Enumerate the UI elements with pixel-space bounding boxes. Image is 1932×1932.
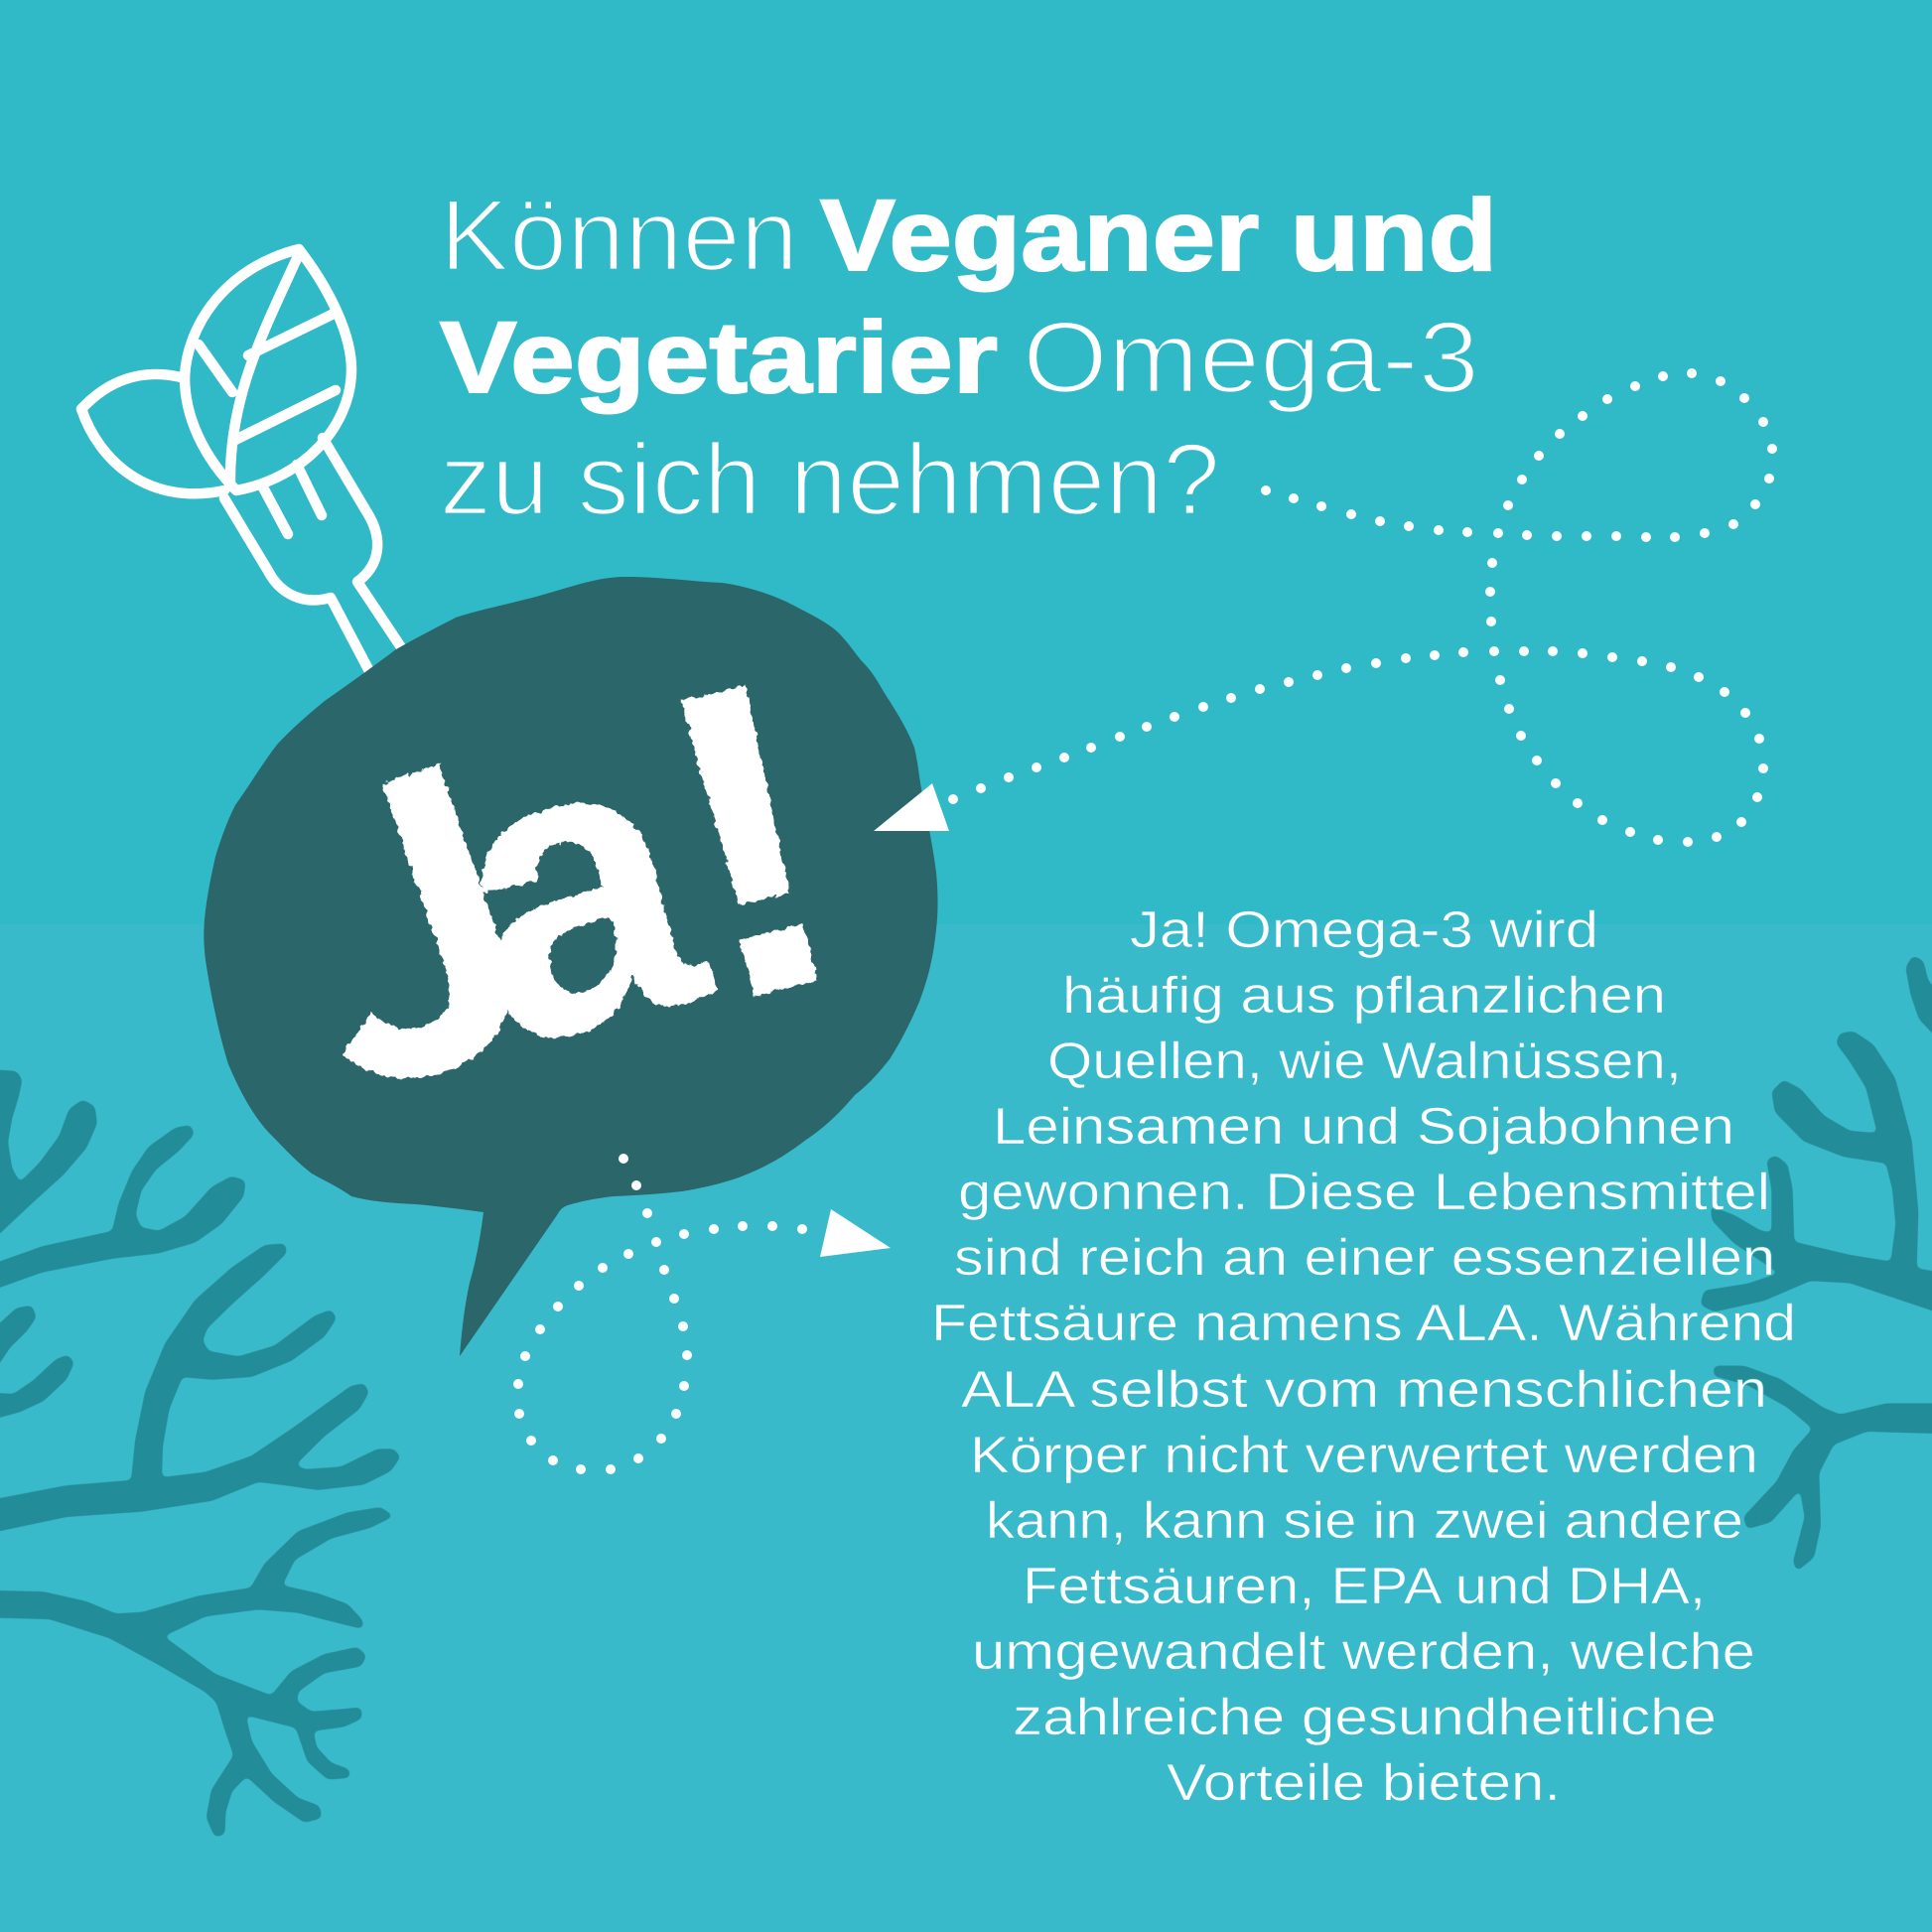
body text: häufig aus pflanzlichen bbox=[1062, 967, 1666, 1025]
dotted arrow: title to bubble bbox=[874, 368, 1777, 847]
big word: Ja!: J bbox=[202, 600, 603, 1205]
body text: gewonnen. Diese Lebensmittel bbox=[958, 1164, 1770, 1221]
body text: Körper nicht verwertet werden bbox=[970, 1427, 1758, 1484]
icon: fork with leaves bbox=[81, 249, 401, 671]
body text: kann, kann sie in zwei andere bbox=[986, 1492, 1743, 1550]
title: Vegetarier bbox=[440, 301, 998, 414]
body text: sind reich an einer essenziellen bbox=[954, 1229, 1775, 1287]
body text: Fettsäuren, EPA und DHA, bbox=[1023, 1558, 1706, 1615]
big word: Ja!: ! bbox=[616, 582, 885, 1098]
title bbox=[440, 179, 1497, 536]
big word: Ja!: a bbox=[406, 633, 740, 1136]
title: Können bbox=[440, 179, 798, 292]
title: zu sich nehmen? bbox=[440, 423, 1220, 536]
title: Omega-3 bbox=[1023, 301, 1479, 414]
dotted arrow: bubble to body text bbox=[513, 1154, 891, 1474]
body text: Fettsäure namens ALA. Während bbox=[931, 1295, 1796, 1352]
body text: Ja! Omega-3 wird bbox=[1130, 901, 1598, 959]
body text: ALA selbst vom menschlichen bbox=[961, 1361, 1767, 1419]
coral: right bbox=[1701, 956, 1932, 1571]
body text bbox=[931, 901, 1796, 1812]
title: Veganer und bbox=[820, 179, 1497, 292]
speech bubble bbox=[204, 577, 937, 1356]
coral: lower left bbox=[0, 1070, 400, 1837]
body text: umgewandelt werden, welche bbox=[972, 1623, 1755, 1681]
body text: Vorteile bieten. bbox=[1167, 1754, 1561, 1812]
body text: Quellen, wie Walnüssen, bbox=[1047, 1033, 1682, 1090]
body text: zahlreiche gesundheitliche bbox=[1013, 1689, 1717, 1746]
big word: Ja! bbox=[202, 582, 885, 1205]
body text: Leinsamen und Sojabohnen bbox=[993, 1098, 1734, 1156]
